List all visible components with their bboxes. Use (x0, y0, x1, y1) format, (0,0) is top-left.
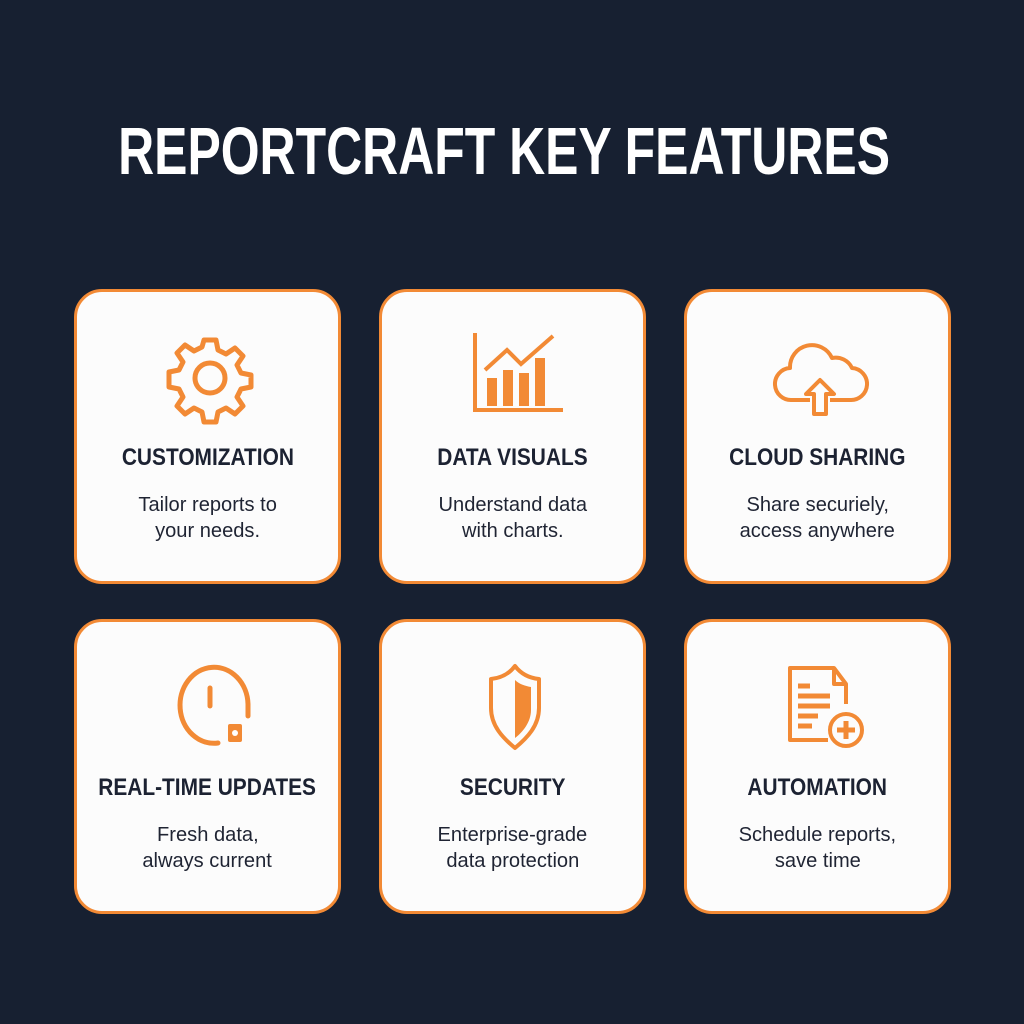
text: Share securiely, (746, 493, 889, 516)
text (143, 823, 272, 872)
panel: real-time updates (74, 619, 341, 914)
icon: shield (489, 664, 541, 750)
text: Schedule reports, (739, 823, 896, 846)
heading: CUSTOMIZATION (121, 444, 294, 471)
text: access anywhere (740, 519, 895, 542)
text (438, 493, 588, 542)
panel: automation (684, 619, 951, 914)
heading: DATA VISUALS (437, 444, 588, 471)
heading: AUTOMATION (748, 774, 887, 801)
heading: CLOUD SHARING (729, 444, 906, 471)
icon: cloud upload (772, 343, 870, 416)
title: REPORTCRAFT KEY FEATURES (118, 114, 890, 189)
text: your needs. (155, 519, 260, 542)
icon: clock (178, 664, 250, 746)
icon: chart (473, 333, 563, 412)
text: data protection (446, 849, 579, 872)
text: Understand data (438, 493, 587, 516)
text: always current (143, 849, 272, 872)
panel: data visuals (379, 289, 646, 584)
heading: SECURITY (460, 774, 565, 801)
text: with charts. (462, 519, 563, 542)
text: Tailor reports to (138, 493, 277, 516)
heading: REAL-TIME UPDATES (99, 774, 316, 801)
text: save time (775, 849, 860, 872)
text: Enterprise-grade (438, 823, 587, 846)
icon: document plus (788, 666, 864, 748)
text (739, 823, 896, 872)
panel: cloud sharing (684, 289, 951, 584)
panel: customization (74, 289, 341, 584)
text (438, 823, 587, 872)
text (138, 493, 277, 542)
icon: gear (166, 338, 254, 424)
text (740, 493, 895, 542)
panel: security (379, 619, 646, 914)
text: Fresh data, (157, 823, 258, 846)
